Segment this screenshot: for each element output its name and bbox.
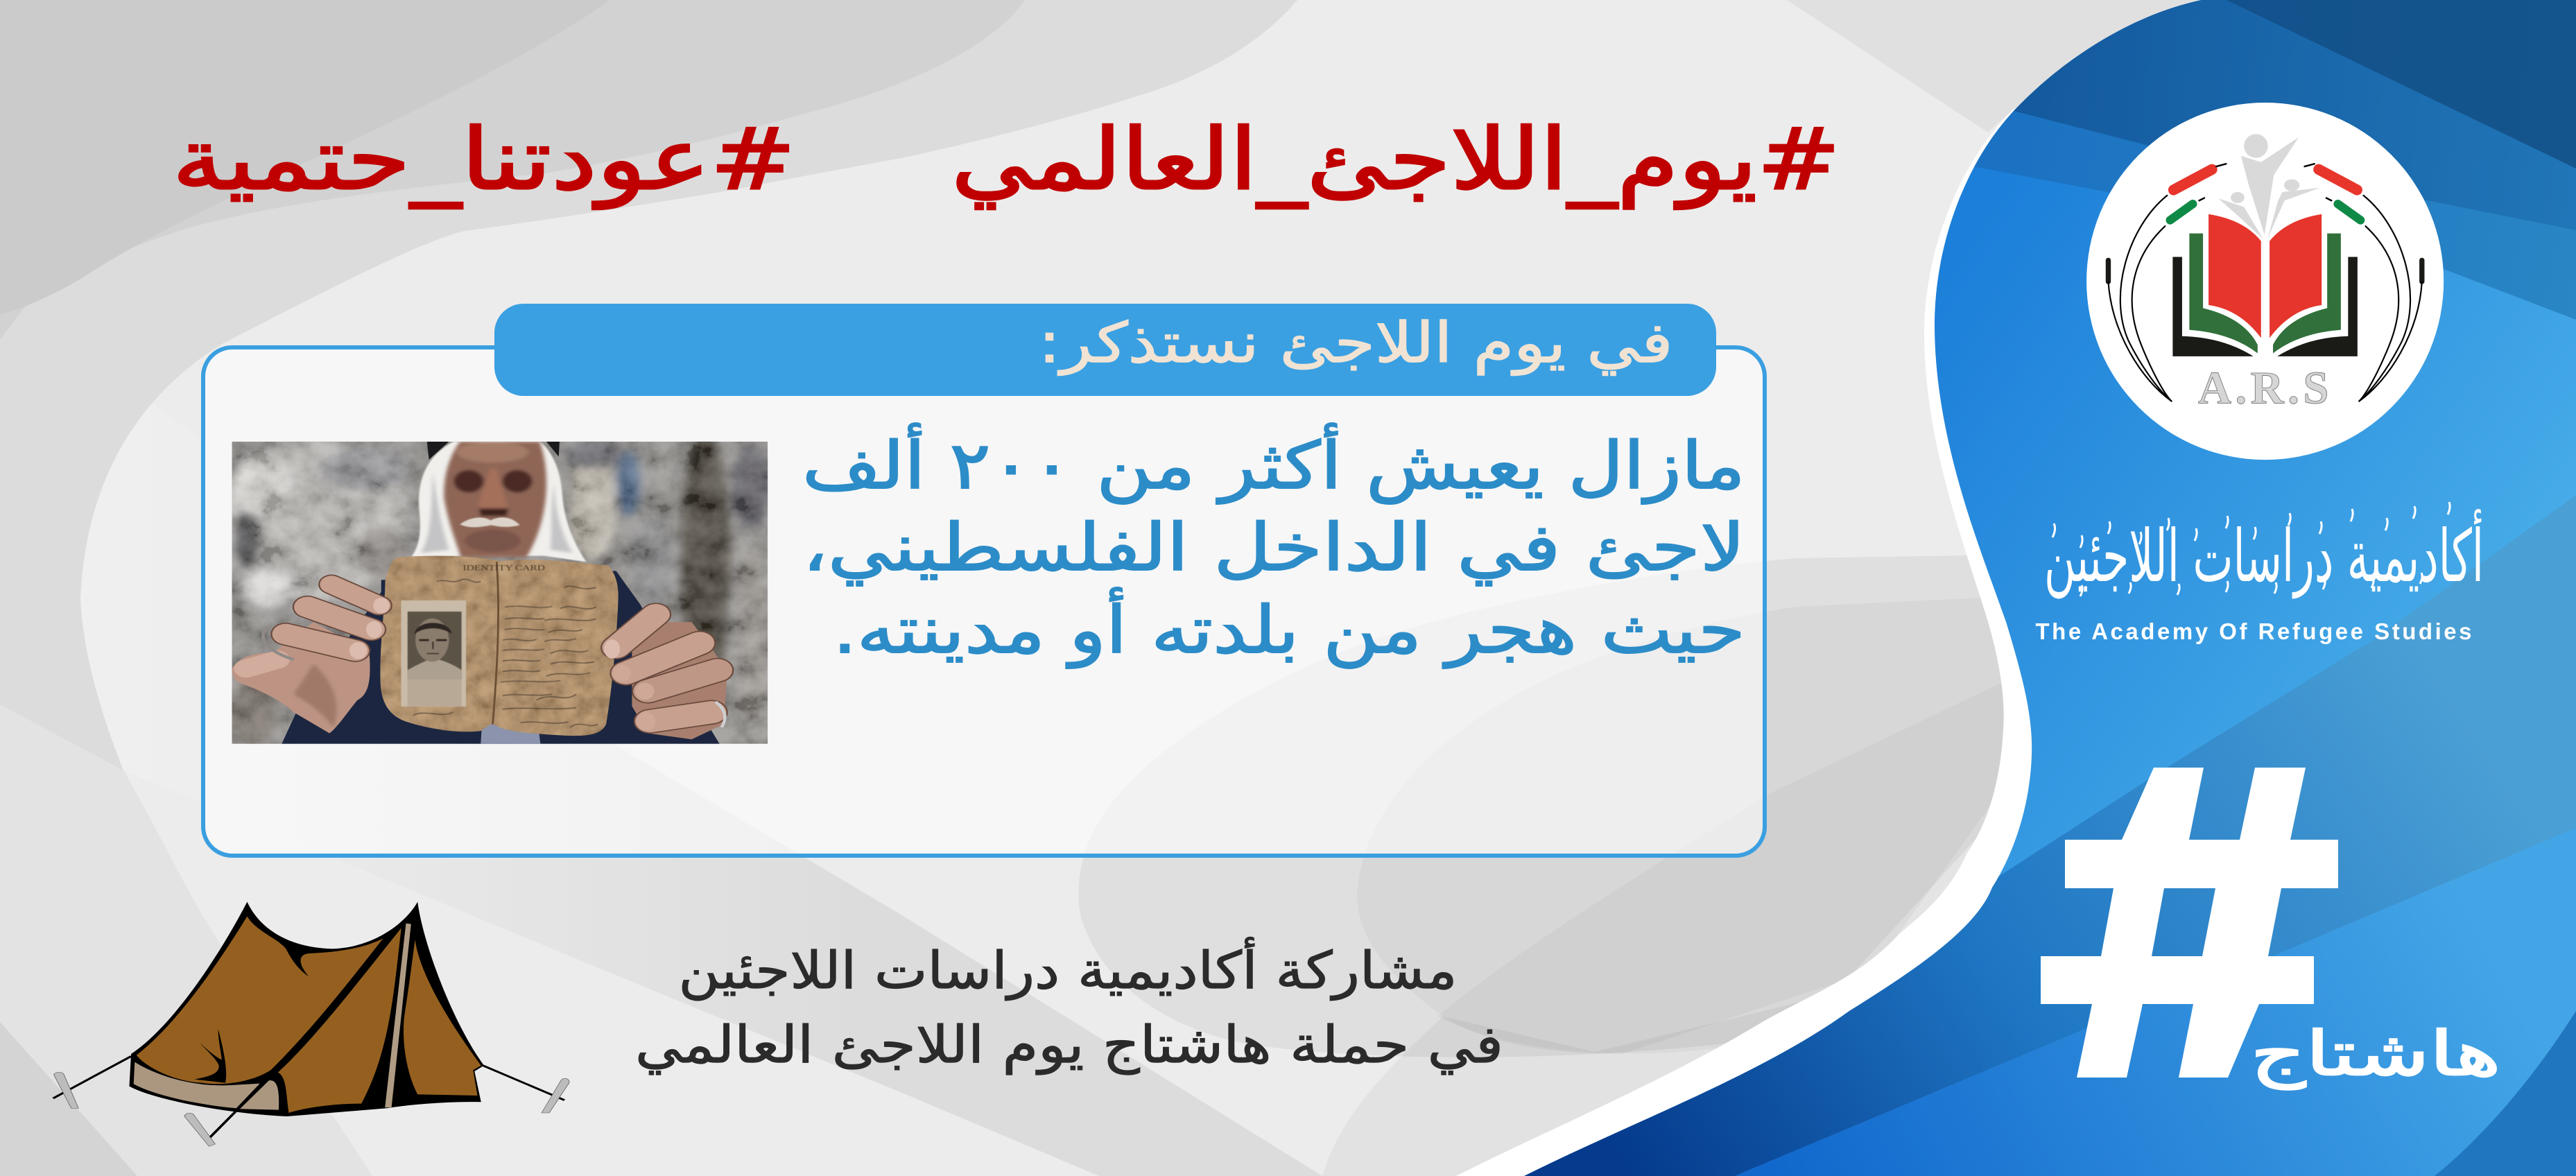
- hashtag title: world refugee day: #يوم_اللاجئ_العالمي: [951, 110, 1840, 209]
- tent pole: [385, 924, 411, 1107]
- hashtag word: هاشتاج: [2251, 1018, 2500, 1089]
- right hand: [604, 614, 727, 739]
- tent floor: [134, 1062, 279, 1110]
- id photo: [401, 600, 466, 707]
- tent pegs: [54, 1072, 569, 1146]
- reed ornaments: [2108, 164, 2422, 401]
- tent canvas: [137, 917, 481, 1113]
- closing text: academy participation: في حملة هاشتاج يوم اللاجئ العالمي: [635, 1015, 1503, 1075]
- closing text: academy participation: [635, 937, 1503, 1075]
- book: [2172, 214, 2358, 356]
- body text block: [802, 423, 1745, 668]
- card frame: [203, 347, 1765, 856]
- icon: tent: [53, 902, 569, 1146]
- shirt: [481, 724, 541, 744]
- logo lettering: A.R.S: [2198, 363, 2333, 414]
- body text block: مازال يعيش أكثر من ٢٠٠ ألف: [802, 423, 1745, 504]
- large hashtag symbol: [2041, 768, 2338, 1078]
- paper stains: [377, 553, 624, 739]
- wall texture: [232, 442, 768, 744]
- canvas fold: [195, 1029, 226, 1083]
- identity card heading: IDENTITY CARD: [463, 563, 545, 572]
- identity card: [377, 553, 624, 739]
- card heading pill: [494, 304, 1716, 396]
- body text block: حيث هجر من بلدته أو مدينته.: [833, 587, 1745, 668]
- tent body outline: [129, 902, 484, 1116]
- logo circle: [2086, 103, 2444, 460]
- head and keffiyeh: [411, 442, 586, 562]
- academy English name: The Academy Of Refugee Studies: [2036, 619, 2471, 644]
- blue side panel: [1456, 0, 2576, 1176]
- body text block: لاجئ في الداخل الفلسطيني،: [802, 510, 1745, 586]
- guy ropes: [53, 1056, 564, 1139]
- white swoosh divider: [1456, 109, 2576, 1176]
- left hand: [232, 585, 389, 734]
- photo: elderly refugee holding identity card: [218, 430, 771, 745]
- hashtag title: our return is inevitable: #عودتنا_حتمية: [172, 110, 796, 209]
- people figures: [2218, 134, 2320, 239]
- panel: main card: [203, 304, 1765, 856]
- blurred wall background: [218, 430, 771, 745]
- card heading text: في يوم اللاجئ نستذكر:: [1039, 311, 1672, 376]
- calligraphic diacritic ticks: [2052, 502, 2450, 596]
- logo: academy emblem: [2086, 103, 2444, 460]
- closing text: academy participation: مشاركة أكاديمية دراسات اللاجئين: [678, 937, 1458, 1001]
- handwritten entries: [413, 579, 598, 727]
- jacket: [282, 571, 720, 744]
